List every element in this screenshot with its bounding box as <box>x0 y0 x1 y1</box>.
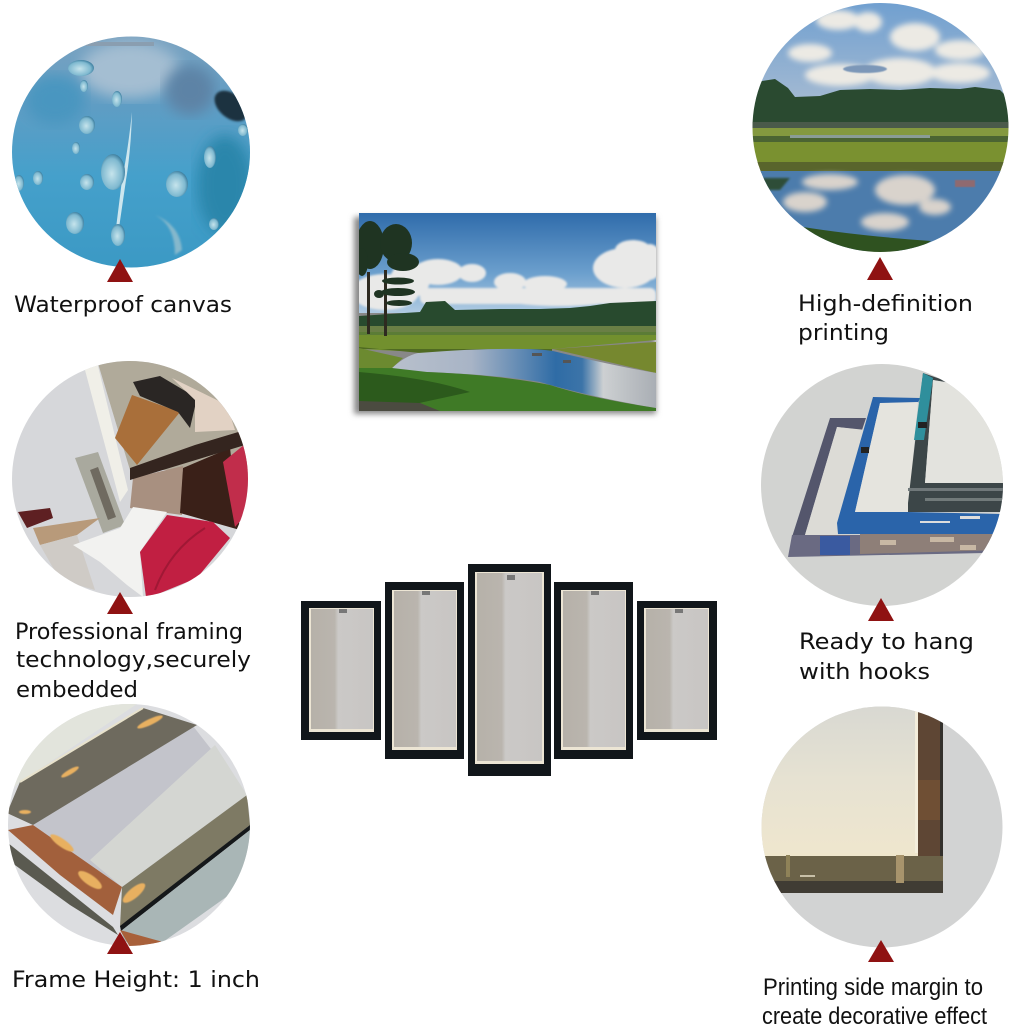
photo: framing tool circle <box>10 360 250 600</box>
panel: professional framing <box>10 360 251 703</box>
label: high-definition printing: High-definition <box>798 292 973 317</box>
label: printing side margin: Printing side margin to <box>763 974 983 1001</box>
frame panel 4 <box>554 582 633 759</box>
product photo: landscape canvas <box>351 213 662 414</box>
panel: printing side margin <box>760 705 1006 1030</box>
icon: red triangle <box>867 257 893 280</box>
frame panel 1 <box>301 601 381 740</box>
label: professional framing: Professional framing <box>15 620 243 645</box>
panel: printing side margin: create decorative effect <box>762 1003 987 1030</box>
panel: ready to hang <box>760 360 1006 685</box>
photo: margin corner circle <box>760 705 1006 949</box>
panel: high-definition printing: printing <box>798 321 889 346</box>
icon: red triangle <box>107 592 133 614</box>
label: waterproof canvas: Waterproof canvas <box>14 293 232 318</box>
photo: golf course circle <box>750 0 1010 260</box>
icon: red triangle <box>107 259 133 282</box>
icon: red triangle <box>868 940 894 962</box>
photo: water droplets circle <box>10 35 253 270</box>
panel: professional framing: embedded <box>16 678 138 703</box>
frame panel 2 <box>385 582 464 759</box>
panel: high-definition printing <box>750 0 1010 346</box>
frame panel 3 <box>468 564 551 776</box>
icon: red triangle <box>868 598 894 621</box>
product photo: five-panel frame backs <box>301 564 717 776</box>
label: frame height: Frame Height: 1 inch <box>12 968 260 993</box>
icon: red triangle <box>107 932 133 954</box>
label: ready to hang: Ready to hang <box>799 630 974 655</box>
panel: ready to hang: with hooks <box>799 660 930 685</box>
panel: professional framing: technology,securely <box>16 648 251 673</box>
panel: waterproof canvas <box>10 35 253 318</box>
photo: stacked frames circle <box>760 360 1006 610</box>
photo: frame corner circle <box>0 700 255 950</box>
panel: frame height <box>0 700 260 993</box>
frame panel 5 <box>637 601 717 740</box>
